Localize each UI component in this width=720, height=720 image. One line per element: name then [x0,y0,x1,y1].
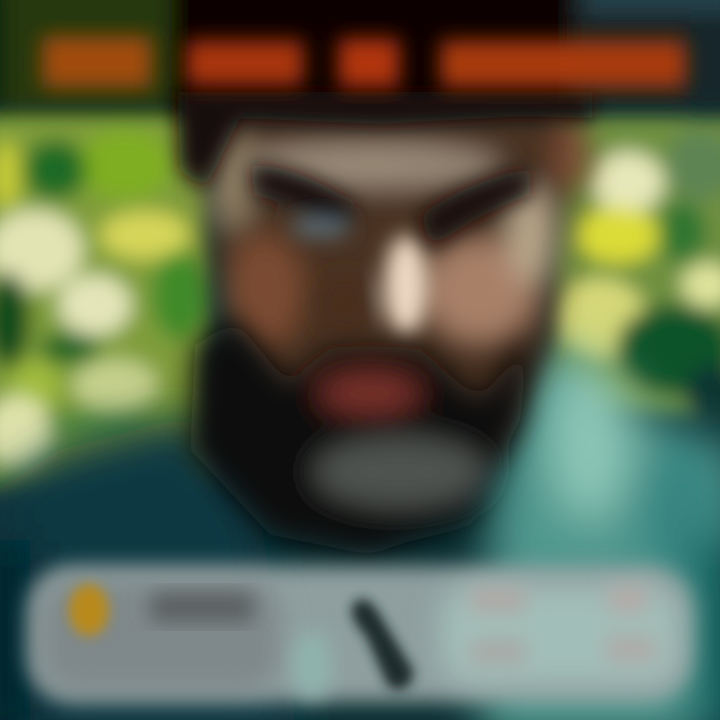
panel: top dark band [0,0,720,115]
icon: dark slash figure [352,599,414,690]
card right tint [440,585,680,685]
panel: left foliage background [0,110,210,490]
card left shade [40,580,280,692]
heading: blurred title blocks [42,36,686,88]
title block 3 [338,38,400,88]
card background [28,566,692,702]
icon: eyes and brows [250,165,530,248]
title block 2 [186,40,304,86]
panel: right foliage background [550,115,720,425]
blurred text blocks: pink labels [470,586,656,664]
card centre highlight [292,631,332,699]
icon: orange badge [69,584,109,636]
title block 1 [42,36,152,88]
panel: hairline shadow [178,92,592,190]
blurred text block: card heading [150,592,254,622]
title block 4 [440,40,686,88]
panel: portrait hair and face [190,110,590,460]
panel: bottom info card [28,566,692,702]
icon: nose highlight [315,235,428,337]
panel: shirt [0,345,720,720]
panel: beard and mouth [190,320,530,555]
